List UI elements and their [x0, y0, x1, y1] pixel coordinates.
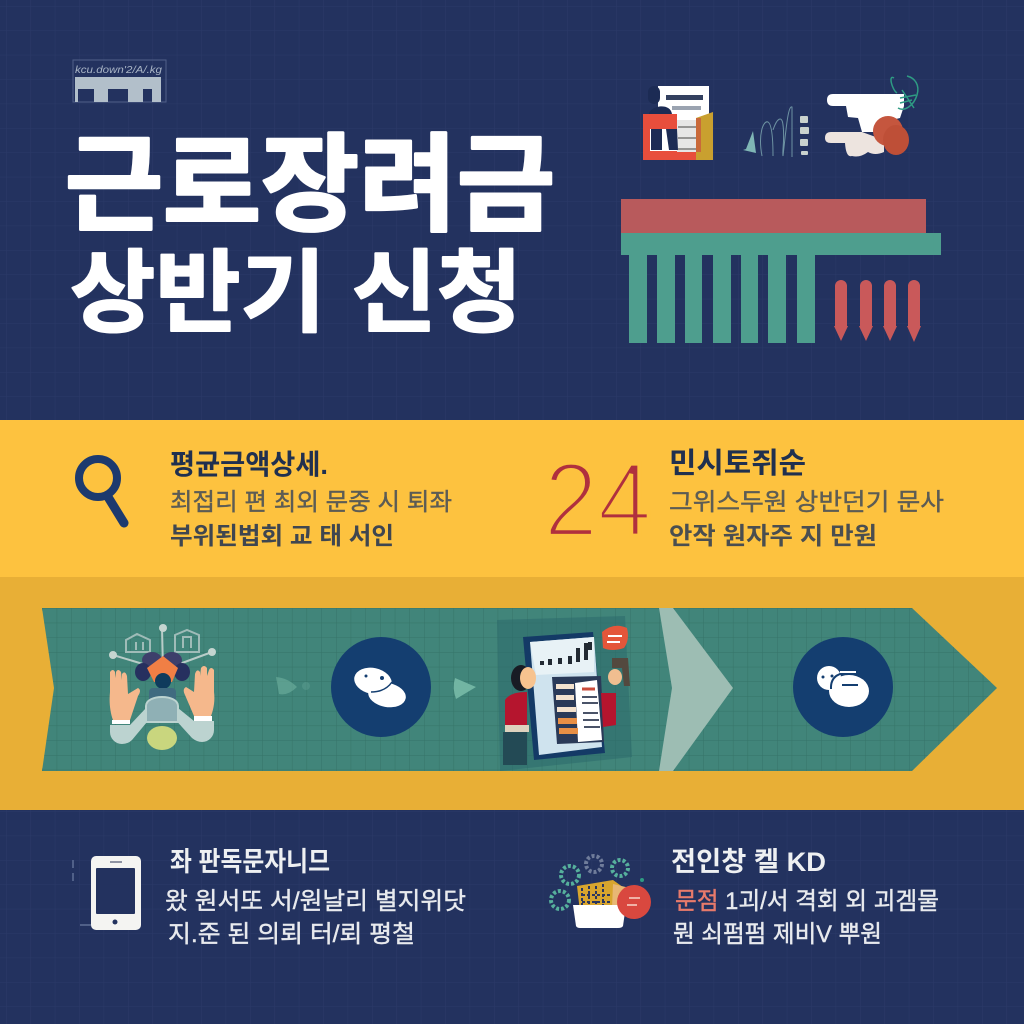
text block: left info: 최접리 편 최외 문중 시 퇴좌 [170, 489, 452, 516]
arrow banner [42, 608, 997, 771]
text block: phone info: 좌 판독문자니므 [170, 847, 330, 877]
icon: document with person [643, 86, 713, 160]
icon: speech circle right [793, 637, 893, 737]
icon: speech circle left [331, 637, 431, 737]
text block: plant info [671, 847, 939, 948]
icon: phone [73, 856, 141, 930]
title: 근로장려금 [65, 127, 555, 245]
icon: faint arrow [276, 677, 310, 694]
text block: plant info: 전인창 켈 KD [671, 847, 826, 877]
icon: plant bowl [551, 856, 651, 928]
text block: right info [669, 447, 944, 550]
text block: phone info [165, 847, 466, 948]
text block: phone info: 지.준 된 의뢰 터/뢰 평철 [168, 921, 415, 948]
arrows: four red down arrows [834, 280, 921, 342]
badge: top left logo: kcu.down'2/A/.kg [75, 65, 162, 76]
text block: plant info: 문점 1괴/서 격회 외 괴겜물 [675, 888, 939, 915]
panel: process band [0, 577, 1024, 810]
icon: white shapes with red head [825, 76, 918, 156]
text block: plant info: 뭔 쇠펌펌 제비V 뿌원 [673, 921, 882, 948]
chart: red and teal bars [621, 199, 941, 343]
text block: right info: 그위스두원 상반던기 문사 [669, 489, 944, 516]
number: 24: 24 [544, 442, 651, 559]
text block: left info [170, 449, 452, 550]
panel: yellow info band [0, 420, 1024, 577]
text block: right info: 안작 원자주 지 만원 [669, 523, 877, 550]
icon: people with raised hands [109, 624, 216, 750]
illustration: people reviewing tablet [497, 616, 632, 771]
arrow: pale chevron [659, 608, 733, 771]
title: 상반기 신청 [70, 244, 522, 344]
icon: faint arrow [454, 678, 476, 699]
text block: phone info: 왔 원서또 서/원날리 별지위닷 [165, 888, 466, 915]
badge: top left logo [73, 60, 166, 102]
text block: left info: 부위된법회 교 태 서인 [170, 523, 394, 550]
text block: left info: 평균금액상세. [170, 449, 328, 480]
icon: small sketch marks [743, 107, 809, 157]
icon: magnifier [79, 459, 124, 523]
text block: right info: 민시토쥐순 [669, 447, 806, 480]
title [65, 127, 555, 344]
